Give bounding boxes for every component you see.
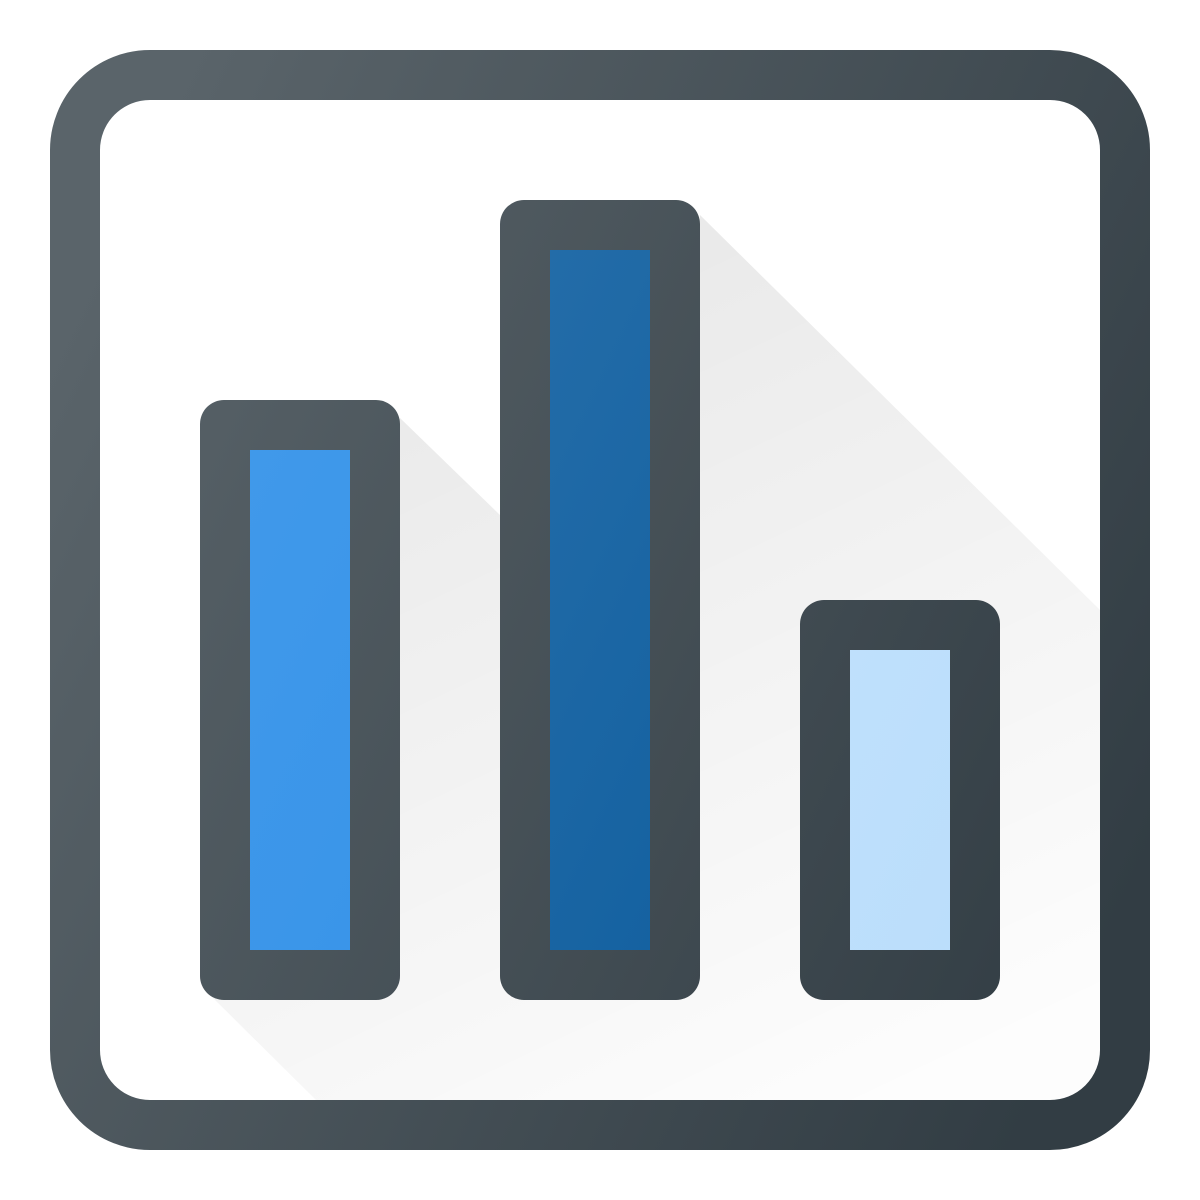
long cast shadow [210,215,1100,1100]
bar: left medium [200,400,400,1000]
rounded frame border [75,75,1125,1125]
bar: right short [800,600,1000,1000]
panel: white frame interior [75,75,1125,1125]
bar: centre tall [500,200,700,1000]
